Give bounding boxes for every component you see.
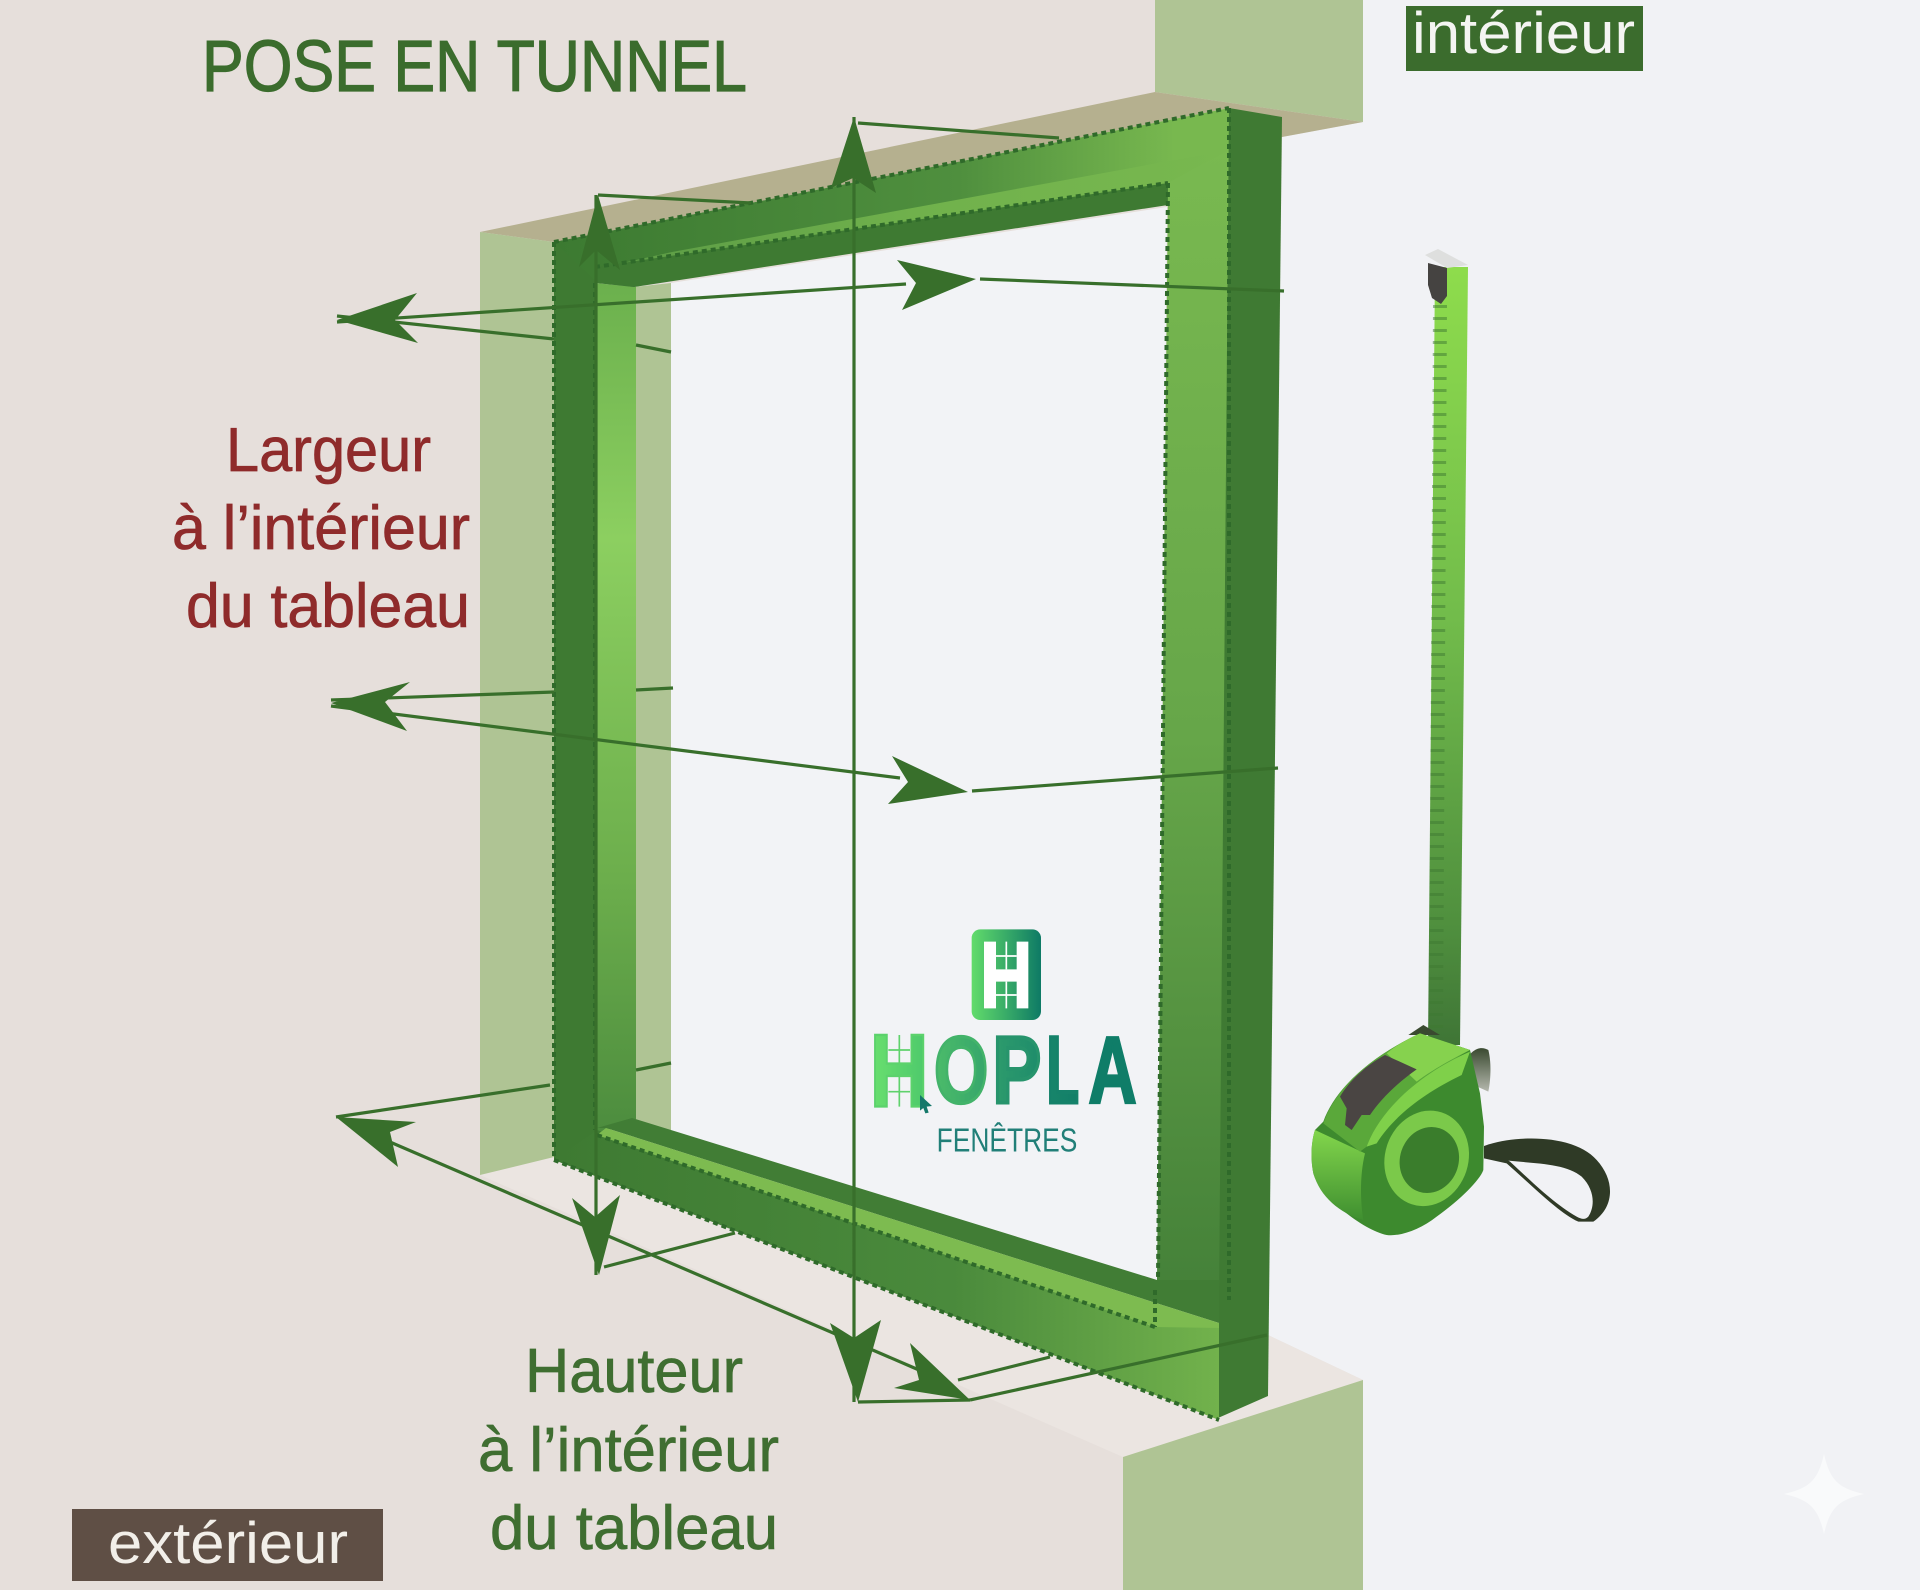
tag: intérieur: intérieur: [1412, 1, 1635, 66]
logo wordmark: L: [1047, 1019, 1079, 1124]
logo wordmark: P: [993, 1018, 1041, 1123]
label: hauteur: [478, 1337, 779, 1563]
icon: sparkle watermark: [1784, 1454, 1864, 1534]
logo icon: [972, 929, 1041, 1020]
top face: [554, 108, 1229, 287]
wall block bottom: [1123, 1380, 1363, 1590]
title: POSE EN TUNNEL: [202, 27, 747, 107]
exterior jamb: [480, 232, 554, 1175]
ceiling reveal: [480, 92, 1363, 242]
tape strap: [1484, 1138, 1610, 1222]
bottom inner dark band: [597, 1118, 1219, 1323]
tag: extérieur: [72, 1509, 383, 1581]
left dark post: [554, 235, 596, 1160]
logo wordmark: H: [869, 1012, 929, 1129]
arrow: up centre: [831, 117, 876, 193]
bottom bright band: [597, 1128, 1219, 1328]
tape case front: [1312, 1130, 1365, 1220]
arrow: bottom left: [336, 1117, 416, 1167]
tape hook: [1428, 263, 1447, 304]
arrow: middle right: [888, 756, 968, 804]
top inner dark stripe: [595, 183, 1168, 287]
tape blade: [1428, 267, 1468, 1045]
logo cursor: [920, 1095, 932, 1113]
tape case silhouette: [1312, 1033, 1484, 1235]
tape cylinder: [1463, 1048, 1490, 1092]
arrow: down left: [572, 1195, 620, 1275]
arrow: top left: [337, 293, 418, 343]
bottom outer face: [554, 1130, 1219, 1420]
label: largeur: du tableau: [186, 572, 470, 641]
window frame: [554, 108, 1282, 1420]
logo wordmark: [869, 1012, 1137, 1129]
tag: extérieur: extérieur: [108, 1511, 348, 1576]
label: largeur: [172, 416, 470, 641]
label: largeur: Largeur: [226, 416, 431, 485]
left lit jamb: [595, 283, 636, 1135]
arrow: top right: [897, 260, 976, 310]
arrow: down centre: [830, 1320, 881, 1402]
label: hauteur: du tableau: [490, 1494, 778, 1563]
measuring lines and arrows: [331, 117, 1284, 1402]
logo subtitle: FENÊTRES: [937, 1123, 1077, 1160]
arrow: bottom right: [894, 1343, 970, 1400]
inner translucent jamb: [634, 283, 671, 1131]
top lighter band: [600, 150, 1229, 268]
right outer dark face: [1218, 108, 1282, 1418]
tape window: [1340, 1055, 1417, 1130]
wall block top: [1155, 0, 1363, 122]
logo wordmark: O: [934, 1017, 988, 1123]
arrow: up left: [579, 195, 620, 270]
arrow: middle left: [331, 682, 410, 731]
label: hauteur: Hauteur: [525, 1337, 743, 1406]
logo wordmark: A: [1088, 1018, 1137, 1123]
logo: Hopla Fenêtres: [869, 929, 1137, 1160]
serrated edges: [554, 108, 1229, 1420]
tape case top: [1323, 1033, 1470, 1152]
label: largeur: à l’intérieur: [172, 494, 470, 563]
icon: tape measure: [1312, 249, 1610, 1235]
tape ring: [1372, 1099, 1481, 1217]
right inner face: [1157, 150, 1229, 1323]
label: hauteur: à l’intérieur: [478, 1416, 779, 1485]
